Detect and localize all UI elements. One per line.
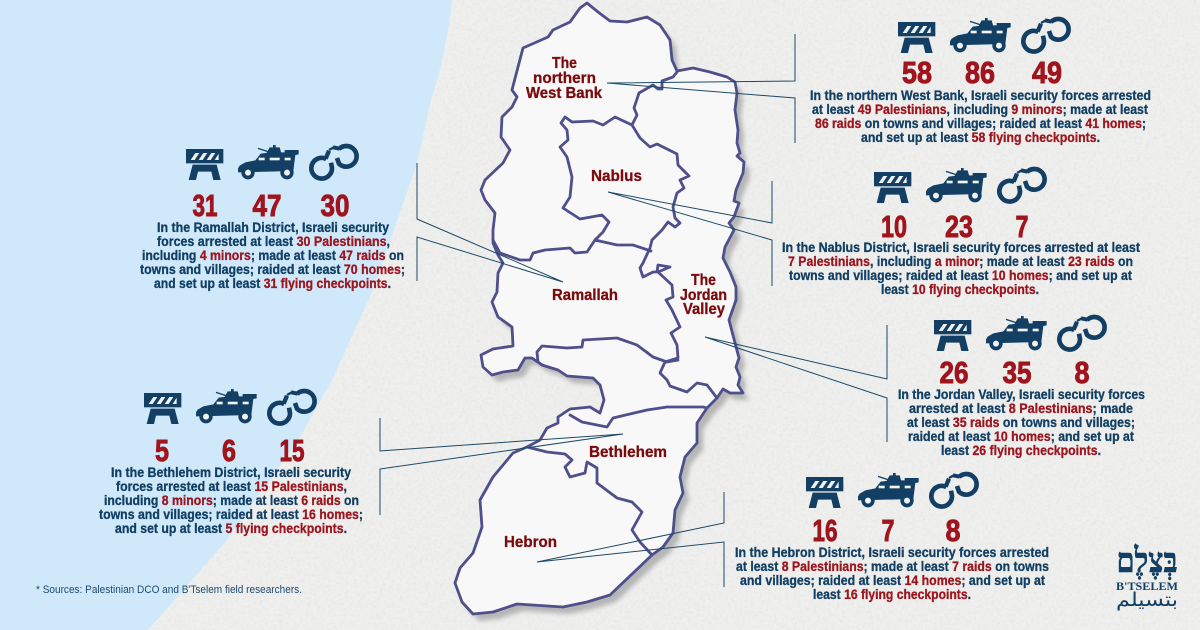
stat numbers: 8 bbox=[946, 513, 960, 548]
icon: military vehicle bbox=[196, 389, 257, 423]
leader lines: Ramallah bbox=[417, 163, 563, 282]
stat numbers: 49 bbox=[1032, 55, 1062, 90]
stat numbers bbox=[902, 55, 1062, 90]
district label: northern West Bank: The bbox=[552, 55, 577, 72]
panel: northern West Bank bbox=[810, 18, 1151, 145]
stat numbers bbox=[192, 188, 350, 223]
description text: 7 Palestinians, including a minor; made at least 23 raids on bbox=[788, 254, 1133, 269]
icon: flying checkpoint barrier bbox=[898, 22, 935, 53]
district label: Jordan Valley: Jordan bbox=[680, 287, 727, 304]
icon: military vehicle bbox=[926, 168, 987, 202]
district label: Jordan Valley bbox=[680, 272, 727, 318]
icon: military vehicle bbox=[858, 473, 919, 507]
icon: military vehicle bbox=[986, 316, 1047, 350]
sources note: * Sources: Palestinian DCO and B'Tselem field researchers. bbox=[36, 584, 302, 596]
stat numbers: 30 bbox=[320, 188, 350, 223]
description text bbox=[810, 88, 1151, 145]
icon: handcuffs bbox=[1059, 317, 1105, 350]
description text: including 8 minors; made at least 6 raids on bbox=[104, 493, 359, 508]
description text: least 16 flying checkpoints. bbox=[813, 587, 971, 602]
description text: In the Bethlehem District, Israeli security bbox=[111, 465, 351, 480]
logo: B'Tselem bbox=[1116, 543, 1178, 611]
district label: Jordan Valley: Valley bbox=[683, 301, 725, 318]
district label: Nablus: Nablus bbox=[591, 168, 642, 185]
stat numbers: 58 bbox=[902, 55, 932, 90]
description text: In the northern West Bank, Israeli security forces arrested bbox=[810, 88, 1151, 103]
logo: B'Tselem: بتسيلم bbox=[1116, 589, 1178, 611]
stat numbers: 7 bbox=[1016, 209, 1028, 244]
stat numbers bbox=[881, 209, 1028, 244]
panel: Jordan Valley bbox=[898, 316, 1145, 458]
stat numbers: 8 bbox=[1074, 355, 1090, 390]
description text: arrested at least 8 Palestinians; made bbox=[909, 401, 1133, 416]
stat numbers: 26 bbox=[940, 355, 968, 390]
description text bbox=[782, 240, 1140, 297]
panel: Nablus bbox=[782, 168, 1140, 297]
stat numbers: 15 bbox=[280, 433, 304, 468]
description text: and set up at least 31 flying checkpoints. bbox=[154, 276, 391, 291]
description text: In the Jordan Valley, Israeli security forces bbox=[898, 387, 1145, 402]
description text bbox=[99, 465, 363, 536]
description text: towns and villages; raided at least 16 homes; bbox=[99, 507, 363, 522]
sea area bbox=[0, 0, 452, 630]
icon: handcuffs bbox=[931, 474, 977, 507]
description text: 86 raids on towns and villages; raided at least 41 homes; bbox=[815, 116, 1146, 131]
description text: and set up at least 5 flying checkpoints. bbox=[115, 521, 347, 536]
stat numbers: 47 bbox=[252, 188, 282, 223]
icon: flying checkpoint barrier bbox=[934, 320, 971, 351]
description text: In the Nablus District, Israeli security forces arrested at least bbox=[782, 240, 1140, 255]
description text: and set up at least 58 flying checkpoints. bbox=[861, 130, 1100, 145]
icon: flying checkpoint barrier bbox=[186, 149, 223, 180]
stat numbers: 7 bbox=[882, 513, 894, 548]
district label: Hebron: Hebron bbox=[504, 534, 557, 551]
description text: In the Hebron District, Israeli security forces arrested bbox=[735, 545, 1049, 560]
map of the West Bank bbox=[455, 3, 750, 621]
panel: Bethlehem bbox=[99, 389, 363, 536]
stat numbers: 31 bbox=[192, 188, 218, 223]
description text bbox=[140, 220, 405, 291]
leader lines: northern West Bank bbox=[607, 34, 795, 143]
stat numbers: 5 bbox=[155, 433, 169, 468]
icon: handcuffs bbox=[999, 169, 1045, 202]
description text: and villages; raided at least 14 homes; and set up at bbox=[740, 573, 1045, 588]
stat numbers: 10 bbox=[881, 209, 907, 244]
stat numbers bbox=[155, 433, 304, 468]
icon: handcuffs bbox=[269, 391, 315, 424]
stat numbers: 16 bbox=[812, 513, 838, 548]
stat numbers: 86 bbox=[965, 55, 995, 90]
description text bbox=[735, 545, 1049, 602]
stat numbers: 6 bbox=[222, 433, 236, 468]
logo: B'Tselem: בְּצֶלֶם bbox=[1116, 543, 1178, 580]
icon: flying checkpoint barrier bbox=[144, 393, 181, 424]
description text: towns and villages; raided at least 10 homes; and set up at bbox=[789, 268, 1132, 283]
description text: least 10 flying checkpoints. bbox=[881, 282, 1039, 297]
description text: raided at least 10 homes; and set up at bbox=[908, 429, 1134, 444]
description text: at least 49 Palestinians, including 9 minors; made at least bbox=[812, 102, 1148, 117]
description text: at least 8 Palestinians; made at least 7 raids on towns bbox=[736, 559, 1049, 574]
district label: Ramallah: Ramallah bbox=[552, 287, 618, 304]
description text: least 26 flying checkpoints. bbox=[941, 443, 1101, 458]
logo: B'Tselem: B'TSELEM bbox=[1116, 579, 1178, 593]
map shadow bbox=[461, 10, 750, 621]
district borders bbox=[493, 72, 717, 555]
description text: forces arrested at least 15 Palestinians, bbox=[116, 479, 347, 494]
icon: handcuffs bbox=[1023, 19, 1069, 52]
stat numbers bbox=[940, 355, 1090, 390]
leader lines: Bethlehem bbox=[380, 418, 623, 515]
panel: Hebron bbox=[735, 473, 1049, 602]
stat numbers: 23 bbox=[945, 209, 973, 244]
description text bbox=[898, 387, 1145, 458]
description text: towns and villages; raided at least 70 homes; bbox=[140, 262, 405, 277]
leader lines: Jordan Valley bbox=[705, 325, 887, 442]
map outline bbox=[455, 3, 744, 614]
stat numbers: 35 bbox=[1002, 355, 1032, 390]
district label: northern West Bank bbox=[526, 55, 602, 102]
icon: handcuffs bbox=[311, 146, 357, 179]
leader lines: Nablus bbox=[608, 181, 772, 286]
description text: including 4 minors; made at least 47 raids on bbox=[142, 248, 404, 263]
icon: flying checkpoint barrier bbox=[806, 477, 843, 508]
district label: northern West Bank: northern bbox=[533, 70, 596, 87]
district label: northern West Bank: West Bank bbox=[526, 85, 602, 102]
icon: military vehicle bbox=[238, 145, 299, 179]
panel: Ramallah bbox=[140, 145, 405, 291]
icon: flying checkpoint barrier bbox=[874, 172, 911, 203]
leader lines: Hebron bbox=[537, 492, 724, 587]
district label: Bethlehem: Bethlehem bbox=[589, 444, 667, 461]
description text: forces arrested at least 30 Palestinians, bbox=[157, 234, 390, 249]
description text: at least 35 raids on towns and villages; bbox=[907, 415, 1135, 430]
description text: In the Ramallah District, Israeli security bbox=[157, 220, 389, 235]
district label: Jordan Valley: The bbox=[691, 272, 716, 289]
stat numbers bbox=[812, 513, 960, 548]
icon: military vehicle bbox=[950, 18, 1011, 52]
